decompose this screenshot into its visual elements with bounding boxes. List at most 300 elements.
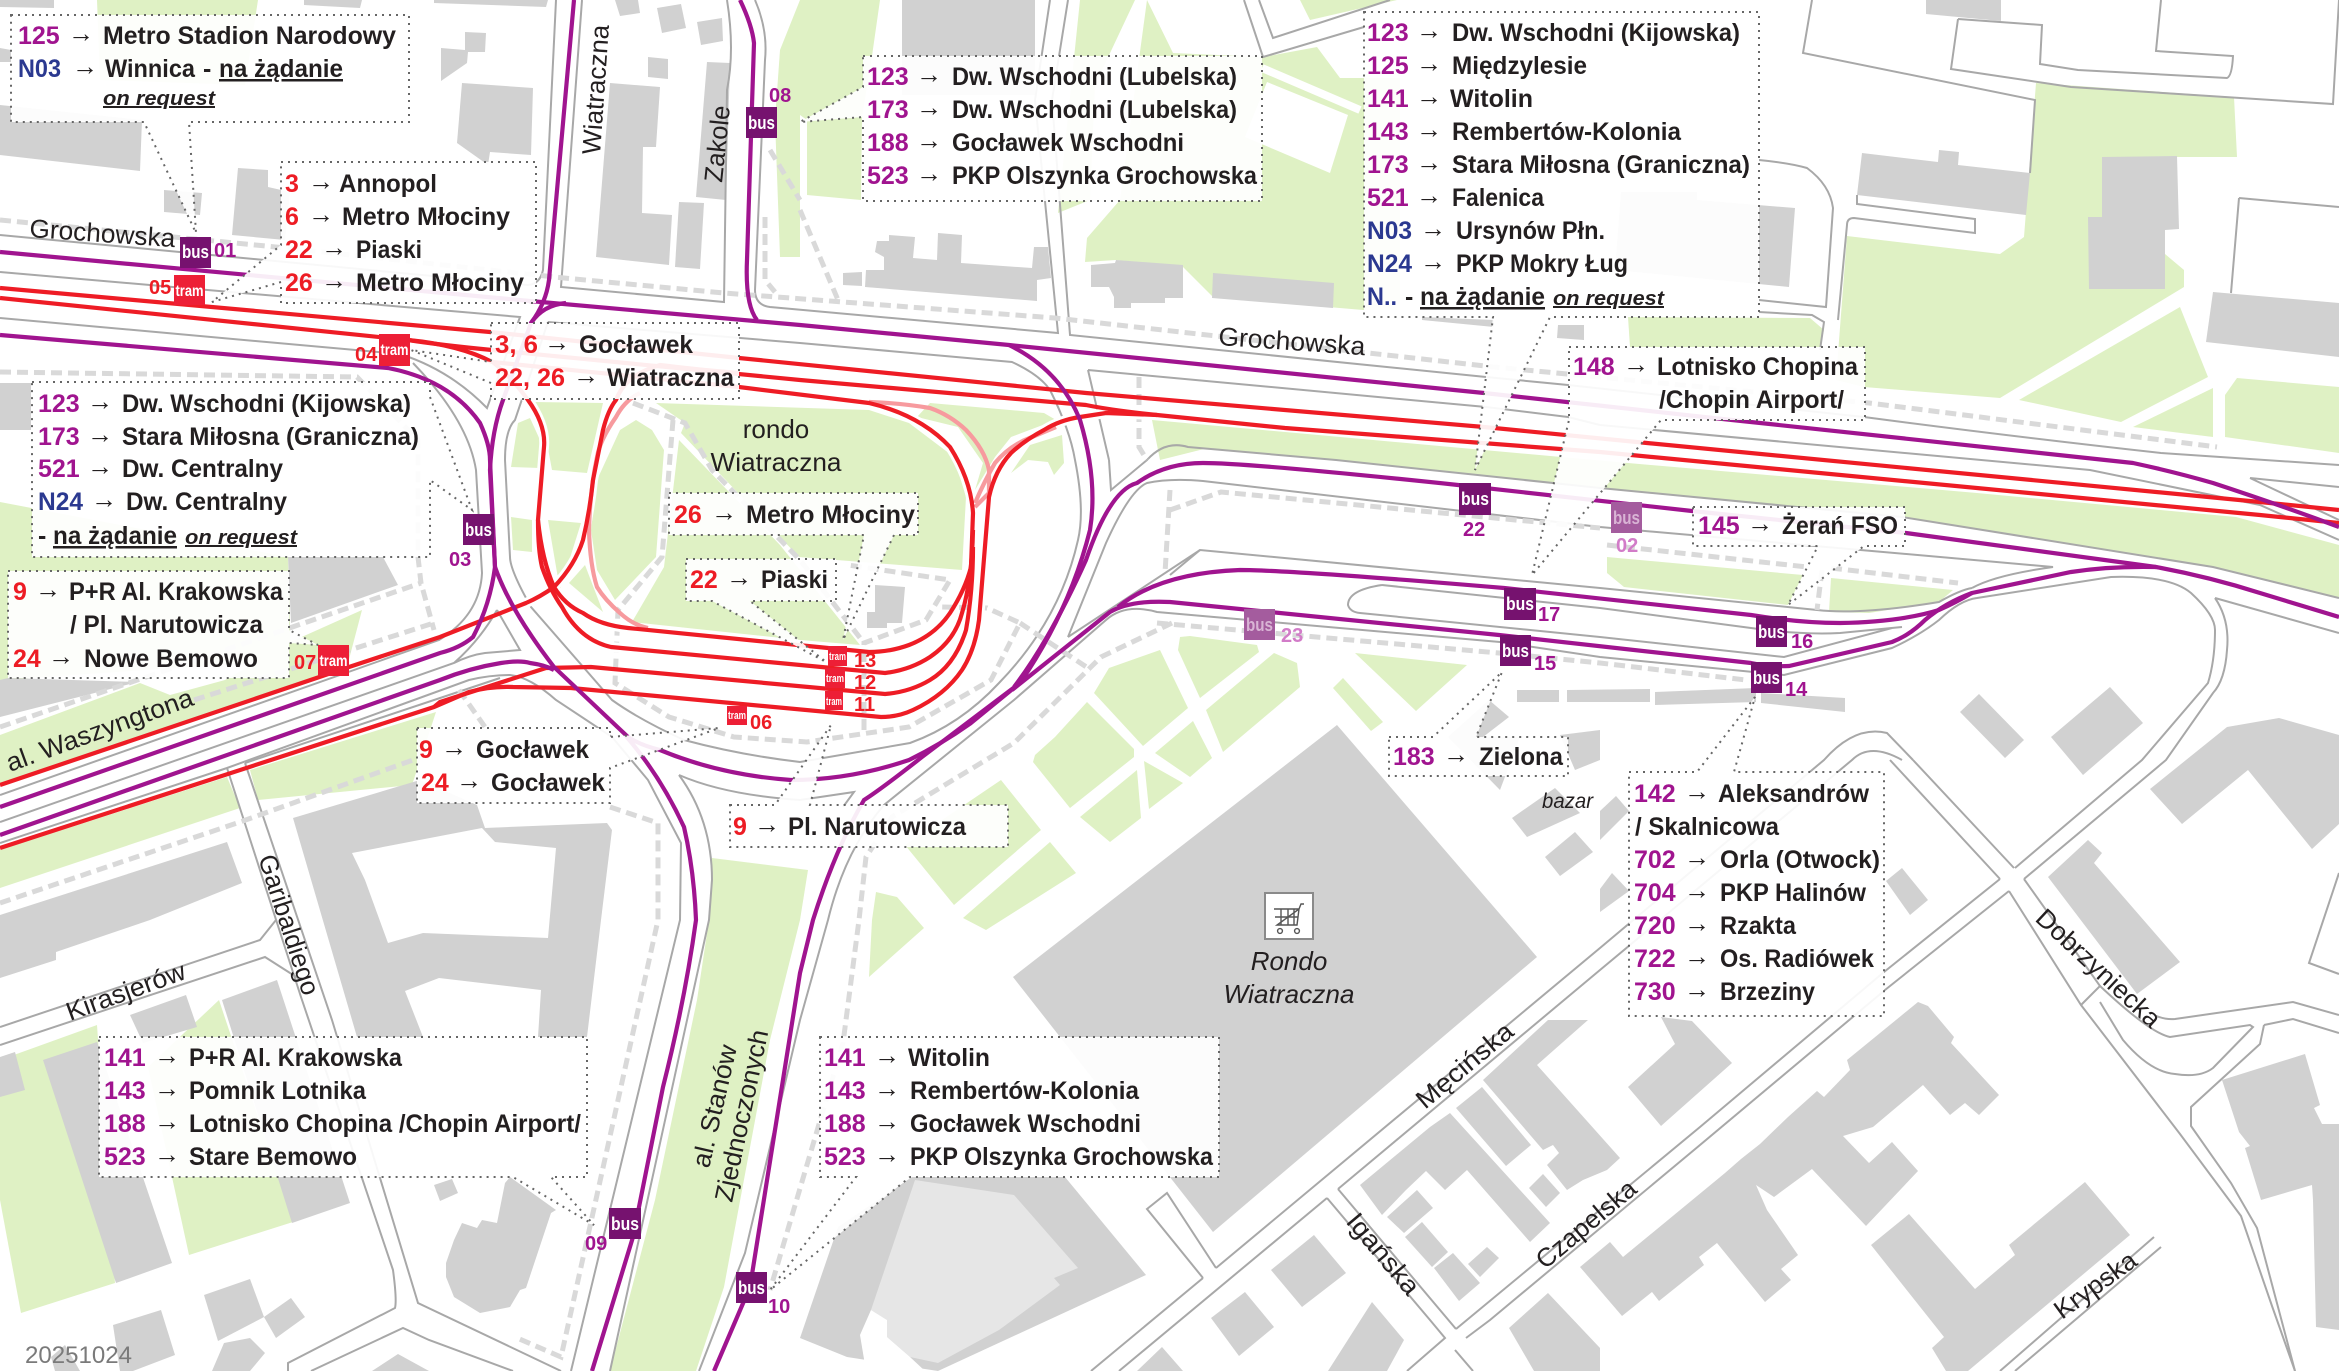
street name: Wiatraczna: Wiatraczna bbox=[576, 23, 615, 155]
stop: tram 11: 11 bbox=[854, 694, 875, 716]
stop: bus 10: bus bbox=[738, 1278, 765, 1298]
row: 145: 145 bbox=[1698, 512, 1740, 540]
row: 521 bbox=[38, 451, 283, 483]
row: 22, 26 bbox=[495, 360, 735, 392]
row: 521: → bbox=[87, 451, 113, 481]
row: 188 bbox=[824, 1106, 1141, 1138]
row: 720: 720 bbox=[1634, 912, 1676, 940]
stop: tram 13: 13 bbox=[854, 650, 876, 672]
row: 173 bbox=[38, 419, 419, 451]
row: 24: → bbox=[456, 765, 482, 795]
row: 123: 123 bbox=[867, 63, 909, 91]
row: Skalnicowa: / Skalnicowa bbox=[1635, 813, 1780, 841]
row: N03: N03 bbox=[18, 55, 61, 83]
street name: Męcińska: Męcińska bbox=[1410, 1015, 1520, 1115]
icon: shopping cart bbox=[1265, 893, 1313, 939]
row: 26: 26 bbox=[285, 269, 313, 297]
stop: tram 12: 12 bbox=[854, 672, 876, 694]
row: 702: → bbox=[1684, 842, 1710, 872]
row: on request note bbox=[1367, 283, 1665, 311]
stop: tram 11: tram bbox=[826, 696, 842, 708]
street name: Kirasjerów: Kirasjerów bbox=[62, 956, 190, 1027]
row: 141: → bbox=[154, 1040, 180, 1070]
stop: bus 08: bus bbox=[748, 113, 775, 133]
stop: bus 09 bbox=[585, 1208, 641, 1255]
place name: Rondo Wiatraczna store: Rondo bbox=[1251, 946, 1327, 976]
row: 6: 6 bbox=[285, 203, 299, 231]
street name: Krypska: Krypska bbox=[2048, 1244, 2143, 1325]
row: 123: Dw. Wschodni (Kijowska) bbox=[1452, 19, 1740, 47]
row: 142 bbox=[1634, 776, 1870, 808]
row: 143: → bbox=[154, 1073, 180, 1103]
callout: stop 04 trams bbox=[411, 323, 739, 399]
stop: bus 08: 08 bbox=[769, 85, 791, 107]
stop: bus 17 bbox=[1504, 588, 1560, 626]
row: 141: Witolin bbox=[1450, 85, 1533, 113]
row: on request: on request bbox=[103, 88, 216, 110]
row: 173: Stara Miłosna (Graniczna) bbox=[122, 423, 419, 451]
row: 704 bbox=[1634, 875, 1867, 907]
stop: bus 15: 15 bbox=[1534, 653, 1556, 675]
row: 22, 26: Wiatraczna bbox=[607, 364, 735, 392]
row: 22: Piaski bbox=[356, 236, 422, 264]
row: 123 bbox=[867, 59, 1237, 91]
callout: stop 12 tram 22 bbox=[686, 559, 836, 662]
row: 3: → bbox=[308, 166, 334, 196]
row: 141: → bbox=[874, 1040, 900, 1070]
row: 188: 188 bbox=[104, 1110, 146, 1138]
row: 188: → bbox=[154, 1106, 180, 1136]
stop: bus 01: 01 bbox=[214, 240, 236, 262]
callout: stop 09 lines bbox=[99, 1037, 594, 1225]
stop: bus 22: 22 bbox=[1463, 519, 1485, 541]
row: 521 bbox=[1367, 180, 1545, 212]
row: 125: → bbox=[1416, 48, 1442, 78]
callout: stop 07 trams bbox=[8, 571, 318, 678]
row: 9: → bbox=[754, 809, 780, 839]
stop: tram 07 bbox=[294, 645, 349, 676]
callout: stop 06 trams bbox=[417, 728, 719, 803]
faded tram spurs bbox=[589, 393, 1056, 628]
row: 521: 521 bbox=[1367, 184, 1409, 212]
row: 523: 523 bbox=[104, 1143, 146, 1171]
row: N24: → bbox=[1420, 246, 1446, 276]
stop: bus 10 bbox=[736, 1272, 790, 1318]
street name: Czapelska: Czapelska bbox=[1530, 1173, 1643, 1275]
row: 143 bbox=[104, 1073, 367, 1105]
row: 3, 6: 3, 6 bbox=[495, 331, 538, 359]
row: 183: 183 bbox=[1393, 743, 1435, 771]
row: 523: → bbox=[916, 158, 942, 188]
stop: bus 02 faded: 02 bbox=[1616, 535, 1638, 557]
row: 26: Metro Młociny bbox=[356, 269, 524, 297]
street name: Grochowska east: Grochowska bbox=[1218, 321, 1367, 361]
row: 26: Metro Młociny bbox=[746, 501, 915, 529]
street name: Grochowska west: Grochowska bbox=[29, 213, 177, 253]
row: 521: Falenica bbox=[1452, 184, 1545, 212]
row: 720: Rzakta bbox=[1720, 912, 1797, 940]
row: 22: Piaski bbox=[761, 566, 828, 594]
stop: bus 08 bbox=[746, 85, 791, 138]
stop: bus 15: bus bbox=[1502, 641, 1529, 661]
street name: al. Stanów: al. Stanów bbox=[686, 1042, 743, 1170]
stop: bus 14 bbox=[1751, 662, 1808, 701]
row: on request note: on request bbox=[185, 527, 298, 549]
row: on request note: - bbox=[1405, 283, 1413, 311]
row: 523: → bbox=[154, 1139, 180, 1169]
stop: bus 02 faded bbox=[1611, 502, 1642, 557]
row: 22 bbox=[690, 562, 828, 594]
stop: tram 04 bbox=[355, 334, 410, 366]
stop: bus 03 bbox=[449, 514, 494, 571]
row: 123: → bbox=[1416, 15, 1442, 45]
stop: tram 06 bbox=[727, 706, 772, 734]
callout: stop 17 line 148 bbox=[1532, 347, 1865, 575]
stop: bus 16: 16 bbox=[1791, 631, 1813, 653]
row: 143: Rembertów-Kolonia bbox=[1452, 118, 1682, 146]
place name: Rondo Wiatraczna store: Wiatraczna bbox=[1224, 979, 1354, 1009]
row: 188: → bbox=[916, 125, 942, 155]
stop: bus 17: bus bbox=[1506, 594, 1534, 614]
row: 722: Os. Radiówek bbox=[1720, 945, 1874, 973]
street name: al. Waszyngtona: al. Waszyngtona bbox=[2, 682, 198, 778]
row: 521: → bbox=[1416, 180, 1442, 210]
row: 9: Pl. Narutowicza bbox=[788, 813, 967, 841]
row: 148: → bbox=[1623, 349, 1649, 379]
row: 173: → bbox=[1416, 147, 1442, 177]
row: on request note bbox=[38, 522, 298, 550]
row: 123: Dw. Wschodni (Lubelska) bbox=[952, 63, 1237, 91]
row: 143: Rembertów-Kolonia bbox=[910, 1077, 1140, 1105]
stop: tram 04: 04 bbox=[355, 344, 378, 366]
row: 143: → bbox=[1416, 114, 1442, 144]
stop: tram 04: tram bbox=[380, 342, 408, 359]
row: 3: Annopol bbox=[339, 170, 437, 198]
row: 143 bbox=[1367, 114, 1682, 146]
row: 141: Witolin bbox=[908, 1044, 990, 1072]
row: 188: 188 bbox=[867, 129, 909, 157]
callout: stop 10 lines bbox=[770, 1037, 1219, 1290]
row: 22: → bbox=[321, 232, 347, 262]
stop: tram 06: tram bbox=[728, 710, 746, 722]
stop: tram 05 bbox=[149, 275, 205, 305]
place name: rondo Wiatraczna: rondo bbox=[743, 414, 809, 444]
row: 125: 125 bbox=[1367, 52, 1409, 80]
row: 123 bbox=[1367, 15, 1740, 47]
row: 173: → bbox=[916, 92, 942, 122]
row: 24 bbox=[13, 641, 258, 673]
row: 188 bbox=[867, 125, 1184, 157]
row: 173: → bbox=[87, 419, 113, 449]
row: N03: na żądanie bbox=[219, 55, 343, 83]
row: 523: 523 bbox=[867, 162, 909, 190]
stop: tram 05: tram bbox=[176, 283, 204, 300]
row: on request note: na żądanie bbox=[1420, 283, 1545, 311]
stop: bus 03: 03 bbox=[449, 549, 471, 571]
row: 125: Metro Stadion Narodowy bbox=[103, 22, 396, 50]
row: 523: PKP Olszynka Grochowska bbox=[910, 1143, 1214, 1171]
stop: tram 12 bbox=[825, 668, 876, 694]
row: Chopin Airport: /Chopin Airport/ bbox=[1659, 386, 1844, 414]
row: 141 bbox=[1367, 81, 1533, 113]
row: 188: 188 bbox=[824, 1110, 866, 1138]
stop: bus 14: bus bbox=[1753, 668, 1780, 688]
row: 123: → bbox=[916, 59, 942, 89]
stop: tram 13 bbox=[828, 646, 876, 672]
row: 523 bbox=[824, 1139, 1214, 1171]
row: 523 bbox=[104, 1139, 357, 1171]
row: 143: 143 bbox=[824, 1077, 866, 1105]
row: N24: → bbox=[91, 484, 117, 514]
callout: stop 03 lines bbox=[32, 382, 472, 557]
row: 722: → bbox=[1684, 941, 1710, 971]
callout: stop 15 line 183 bbox=[1389, 672, 1568, 776]
row: 142: Aleksandrów bbox=[1718, 780, 1870, 808]
stop: tram 07: tram bbox=[320, 653, 348, 670]
stop: tram 11 bbox=[825, 691, 875, 716]
row: 26: → bbox=[711, 497, 737, 527]
row: 3, 6 bbox=[495, 327, 693, 359]
row: 24: → bbox=[48, 641, 74, 671]
row: N03: N03 bbox=[1367, 217, 1412, 245]
row: 9: 9 bbox=[13, 578, 27, 606]
row: 523: → bbox=[874, 1139, 900, 1169]
row: 123: 123 bbox=[38, 390, 80, 418]
callout: stop 16 line 145 bbox=[1693, 507, 1905, 605]
row: 24: Gocławek bbox=[491, 769, 605, 797]
row: 704: → bbox=[1684, 875, 1710, 905]
row: 141: → bbox=[1416, 81, 1442, 111]
row: 143: → bbox=[874, 1073, 900, 1103]
place name: Rondo Wiatraczna store bbox=[1224, 946, 1354, 1009]
place name: bazar: bazar bbox=[1542, 790, 1594, 813]
stop: bus 01 bbox=[180, 237, 236, 268]
stop: bus 09: bus bbox=[611, 1214, 639, 1234]
stop: bus 02 faded: bus bbox=[1613, 508, 1640, 528]
row: 9: → bbox=[35, 574, 61, 604]
row: N03: Ursynów Płn. bbox=[1456, 217, 1605, 245]
row: 123: Dw. Wschodni (Kijowska) bbox=[122, 390, 411, 418]
stop: tram 13: tram bbox=[829, 651, 846, 663]
row: on request note: on request bbox=[1553, 288, 1665, 310]
row: 523: 523 bbox=[824, 1143, 866, 1171]
row: N03: → bbox=[1420, 213, 1446, 243]
row: 523 bbox=[867, 158, 1258, 190]
row: 22: 22 bbox=[690, 566, 718, 594]
row: 9 bbox=[733, 809, 967, 841]
stop: bus 22 bbox=[1459, 483, 1491, 541]
callout: stop 11 tram 9 bbox=[730, 725, 1008, 847]
row: N24: PKP Mokry Ług bbox=[1456, 250, 1628, 278]
row: 148: Lotnisko Chopina bbox=[1657, 353, 1859, 381]
stop: tram 06: 06 bbox=[750, 712, 772, 734]
row: 148 bbox=[1573, 349, 1859, 381]
row: 173: 173 bbox=[867, 96, 909, 124]
row: 143: 143 bbox=[1367, 118, 1409, 146]
row: Narutowicza: / Pl. Narutowicza bbox=[70, 611, 264, 639]
row: N24: N24 bbox=[38, 488, 83, 516]
row: 3 bbox=[285, 166, 437, 198]
row: N03 bbox=[18, 51, 343, 83]
row: 141: P+R Al. Krakowska bbox=[189, 1044, 403, 1072]
callout: stop 05 trams bbox=[212, 162, 536, 303]
row: 523: Stare Bemowo bbox=[189, 1143, 357, 1171]
stop: tram 05: 05 bbox=[149, 277, 171, 299]
row: 173: 173 bbox=[1367, 151, 1409, 179]
stop: bus 22: bus bbox=[1461, 489, 1489, 509]
row: 6: Metro Młociny bbox=[342, 203, 510, 231]
row: 142: → bbox=[1684, 776, 1710, 806]
row: 521: 521 bbox=[38, 455, 80, 483]
row: 730: 730 bbox=[1634, 978, 1676, 1006]
row: 730 bbox=[1634, 974, 1815, 1006]
row: 9: 9 bbox=[419, 736, 433, 764]
row: 145 bbox=[1698, 508, 1898, 540]
row: 26: 26 bbox=[674, 501, 702, 529]
row: 722 bbox=[1634, 941, 1874, 973]
row: 26: → bbox=[321, 265, 347, 295]
row: 3: 3 bbox=[285, 170, 299, 198]
row: 6 bbox=[285, 199, 510, 231]
row: 145: Żerań FSO bbox=[1782, 512, 1898, 540]
street name: Zakole: Zakole bbox=[698, 104, 736, 184]
callout: stop 01 lines 125, N03 bbox=[11, 15, 409, 233]
row: 26 bbox=[674, 497, 915, 529]
place name: rondo Wiatraczna bbox=[710, 414, 842, 477]
callout: stop 14 lines bbox=[1629, 697, 1884, 1016]
row: 523: PKP Olszynka Grochowska bbox=[952, 162, 1258, 190]
stop: bus 15 bbox=[1500, 635, 1556, 675]
row: 173: Dw. Wschodni (Lubelska) bbox=[952, 96, 1237, 124]
row: N03: - bbox=[203, 55, 211, 83]
row: 704: PKP Halinów bbox=[1720, 879, 1867, 907]
stop: bus 16 bbox=[1756, 616, 1813, 653]
street name: Garibaldiego: Garibaldiego bbox=[252, 851, 326, 999]
row: 702: Orla (Otwock) bbox=[1720, 846, 1880, 874]
street name: Zjednoczonych: Zjednoczonych bbox=[709, 1027, 774, 1204]
street name: Dobrzyniecka: Dobrzyniecka bbox=[2030, 902, 2168, 1034]
row: on request note: N.. bbox=[1367, 283, 1397, 311]
row: 22: 22 bbox=[285, 236, 313, 264]
stop: tram 07: 07 bbox=[294, 652, 316, 674]
row: 143: Pomnik Lotnika bbox=[189, 1077, 367, 1105]
stop: bus 03: bus bbox=[465, 520, 492, 540]
white paths across green bbox=[1245, 68, 1360, 173]
row: 24: Nowe Bemowo bbox=[84, 645, 258, 673]
row: 183: → bbox=[1443, 739, 1469, 769]
row: 125: 125 bbox=[18, 22, 60, 50]
stop: bus 01: bus bbox=[182, 242, 209, 262]
row: N24: Dw. Centralny bbox=[126, 488, 287, 516]
stop: bus 17: 17 bbox=[1538, 604, 1560, 626]
row: 730: → bbox=[1684, 974, 1710, 1004]
row: on request note: na żądanie bbox=[53, 522, 177, 550]
row: on request note: - bbox=[38, 522, 46, 550]
row: 148: 148 bbox=[1573, 353, 1615, 381]
stop: bus 23 faded: bus bbox=[1246, 615, 1273, 635]
stop: bus 23 faded: 23 bbox=[1281, 625, 1303, 647]
row: 24: 24 bbox=[421, 769, 449, 797]
row: 145: → bbox=[1747, 508, 1773, 538]
row: 173 bbox=[867, 92, 1237, 124]
row: 123 bbox=[38, 386, 411, 418]
row: 173: 173 bbox=[38, 423, 80, 451]
place name: rondo Wiatraczna: Wiatraczna bbox=[710, 447, 842, 477]
row: 173 bbox=[1367, 147, 1750, 179]
row: 125 bbox=[1367, 48, 1587, 80]
row: 143 bbox=[824, 1073, 1140, 1105]
row: 141: 141 bbox=[824, 1044, 866, 1072]
row: 142: 142 bbox=[1634, 780, 1676, 808]
row: 141: 141 bbox=[1367, 85, 1409, 113]
row: 125: Międzylesie bbox=[1452, 52, 1587, 80]
row: 123: 123 bbox=[1367, 19, 1409, 47]
row: 24: 24 bbox=[13, 645, 41, 673]
row: 702: 702 bbox=[1634, 846, 1676, 874]
row: 143: 143 bbox=[104, 1077, 146, 1105]
row: N24 bbox=[1367, 246, 1628, 278]
row: N24 bbox=[38, 484, 287, 516]
row: 188: → bbox=[874, 1106, 900, 1136]
row: N03 bbox=[1367, 213, 1605, 245]
row: 123: → bbox=[87, 386, 113, 416]
stop: bus 23 faded bbox=[1244, 609, 1303, 647]
row: 22, 26: → bbox=[573, 360, 599, 390]
lighter building bbox=[871, 1180, 1078, 1363]
row: 9 bbox=[13, 574, 284, 606]
row: N03: → bbox=[72, 51, 98, 81]
stop: bus 09: 09 bbox=[585, 1233, 607, 1255]
row: 730: Brzeziny bbox=[1720, 978, 1815, 1006]
row: 9: Gocławek bbox=[476, 736, 589, 764]
row: N03: Winnica bbox=[105, 55, 196, 83]
row: 188: Gocławek Wschodni bbox=[910, 1110, 1141, 1138]
row: 188: Gocławek Wschodni bbox=[952, 129, 1184, 157]
stop: tram 12: tram bbox=[826, 673, 844, 685]
row: N24: N24 bbox=[1367, 250, 1412, 278]
row: 720 bbox=[1634, 908, 1797, 940]
row: 141: 141 bbox=[104, 1044, 146, 1072]
callout: stop 08 lines bbox=[800, 56, 1262, 201]
date stamp: 20251024 bbox=[25, 1342, 132, 1369]
row: 183 bbox=[1393, 739, 1564, 771]
stop: bus 16: bus bbox=[1758, 622, 1785, 642]
row: 3, 6: → bbox=[544, 327, 570, 357]
row: 9: → bbox=[441, 732, 467, 762]
row: 125 bbox=[18, 18, 396, 50]
tram lines bbox=[0, 288, 2339, 848]
row: 9: 9 bbox=[733, 813, 747, 841]
row: 9: P+R Al. Krakowska bbox=[69, 578, 284, 606]
street name: Igańska: Igańska bbox=[1340, 1207, 1427, 1301]
row: 141 bbox=[824, 1040, 990, 1072]
row: 704: 704 bbox=[1634, 879, 1676, 907]
callout: stop 13 tram 26 bbox=[669, 493, 918, 640]
row: 24 bbox=[421, 765, 605, 797]
row: 22, 26: 22, 26 bbox=[495, 364, 565, 392]
row: 720: → bbox=[1684, 908, 1710, 938]
row: 722: 722 bbox=[1634, 945, 1676, 973]
white line casings bbox=[490, 360, 1157, 668]
row: 141 bbox=[104, 1040, 403, 1072]
row: 6: → bbox=[308, 199, 334, 229]
callout: stop 22 lines bbox=[1364, 12, 1759, 470]
row: 702 bbox=[1634, 842, 1880, 874]
row: 521: Dw. Centralny bbox=[122, 455, 283, 483]
row: 183: Zielona bbox=[1479, 743, 1564, 771]
stop: bus 10: 10 bbox=[768, 1296, 790, 1318]
row: 188 bbox=[104, 1106, 581, 1138]
